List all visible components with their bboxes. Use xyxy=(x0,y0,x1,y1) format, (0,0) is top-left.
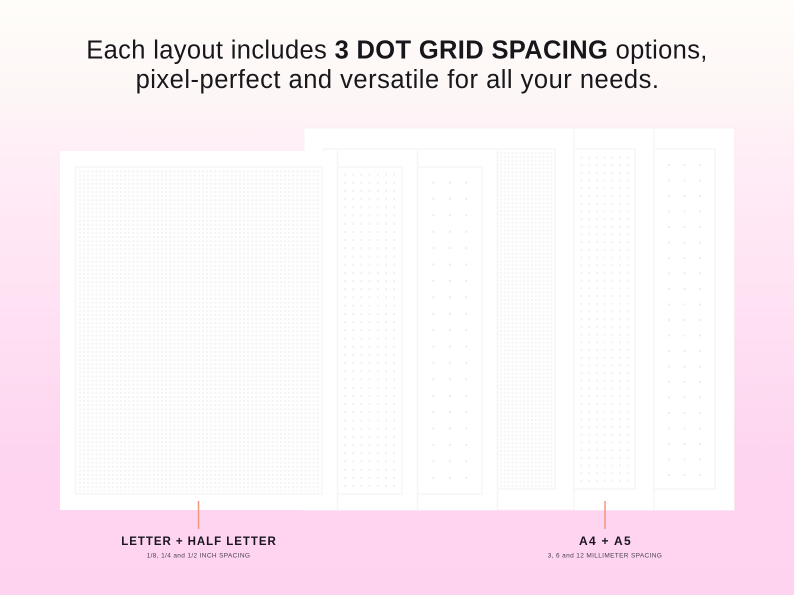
sheet: A4 3 millimeter grid xyxy=(304,128,734,510)
callout: Letter + Half Letter xyxy=(121,501,277,560)
sheet: half letter 1/4 inch grid xyxy=(338,151,418,510)
panel: Letter and Half Letter sheets xyxy=(60,151,498,510)
panel: A4 and A5 sheets xyxy=(304,128,734,510)
sheet: letter 1/8 inch grid xyxy=(60,151,338,510)
sheet: A4 6 millimeter grid xyxy=(574,128,734,510)
sheet: half letter 1/2 inch grid xyxy=(418,151,498,510)
title xyxy=(86,36,708,94)
callout: A4 + A5 xyxy=(548,501,662,560)
marker line xyxy=(604,501,606,529)
callout: A4 + A5: A4 + A5 xyxy=(579,534,632,548)
callout: Letter + Half Letter: 1/8, 1/4 and 1/2 INCH SPACING xyxy=(147,552,250,560)
title: Each layout includes 3 DOT GRID SPACING options, xyxy=(86,36,708,64)
sheet: A4 12 millimeter grid xyxy=(654,128,734,510)
callout: Letter + Half Letter: LETTER + HALF LETTER xyxy=(121,536,277,548)
title: pixel-perfect and versatile for all your needs. xyxy=(136,66,659,94)
callout: A4 + A5: 3, 6 and 12 MILLIMETER SPACING xyxy=(548,552,662,560)
marker line xyxy=(198,501,200,529)
